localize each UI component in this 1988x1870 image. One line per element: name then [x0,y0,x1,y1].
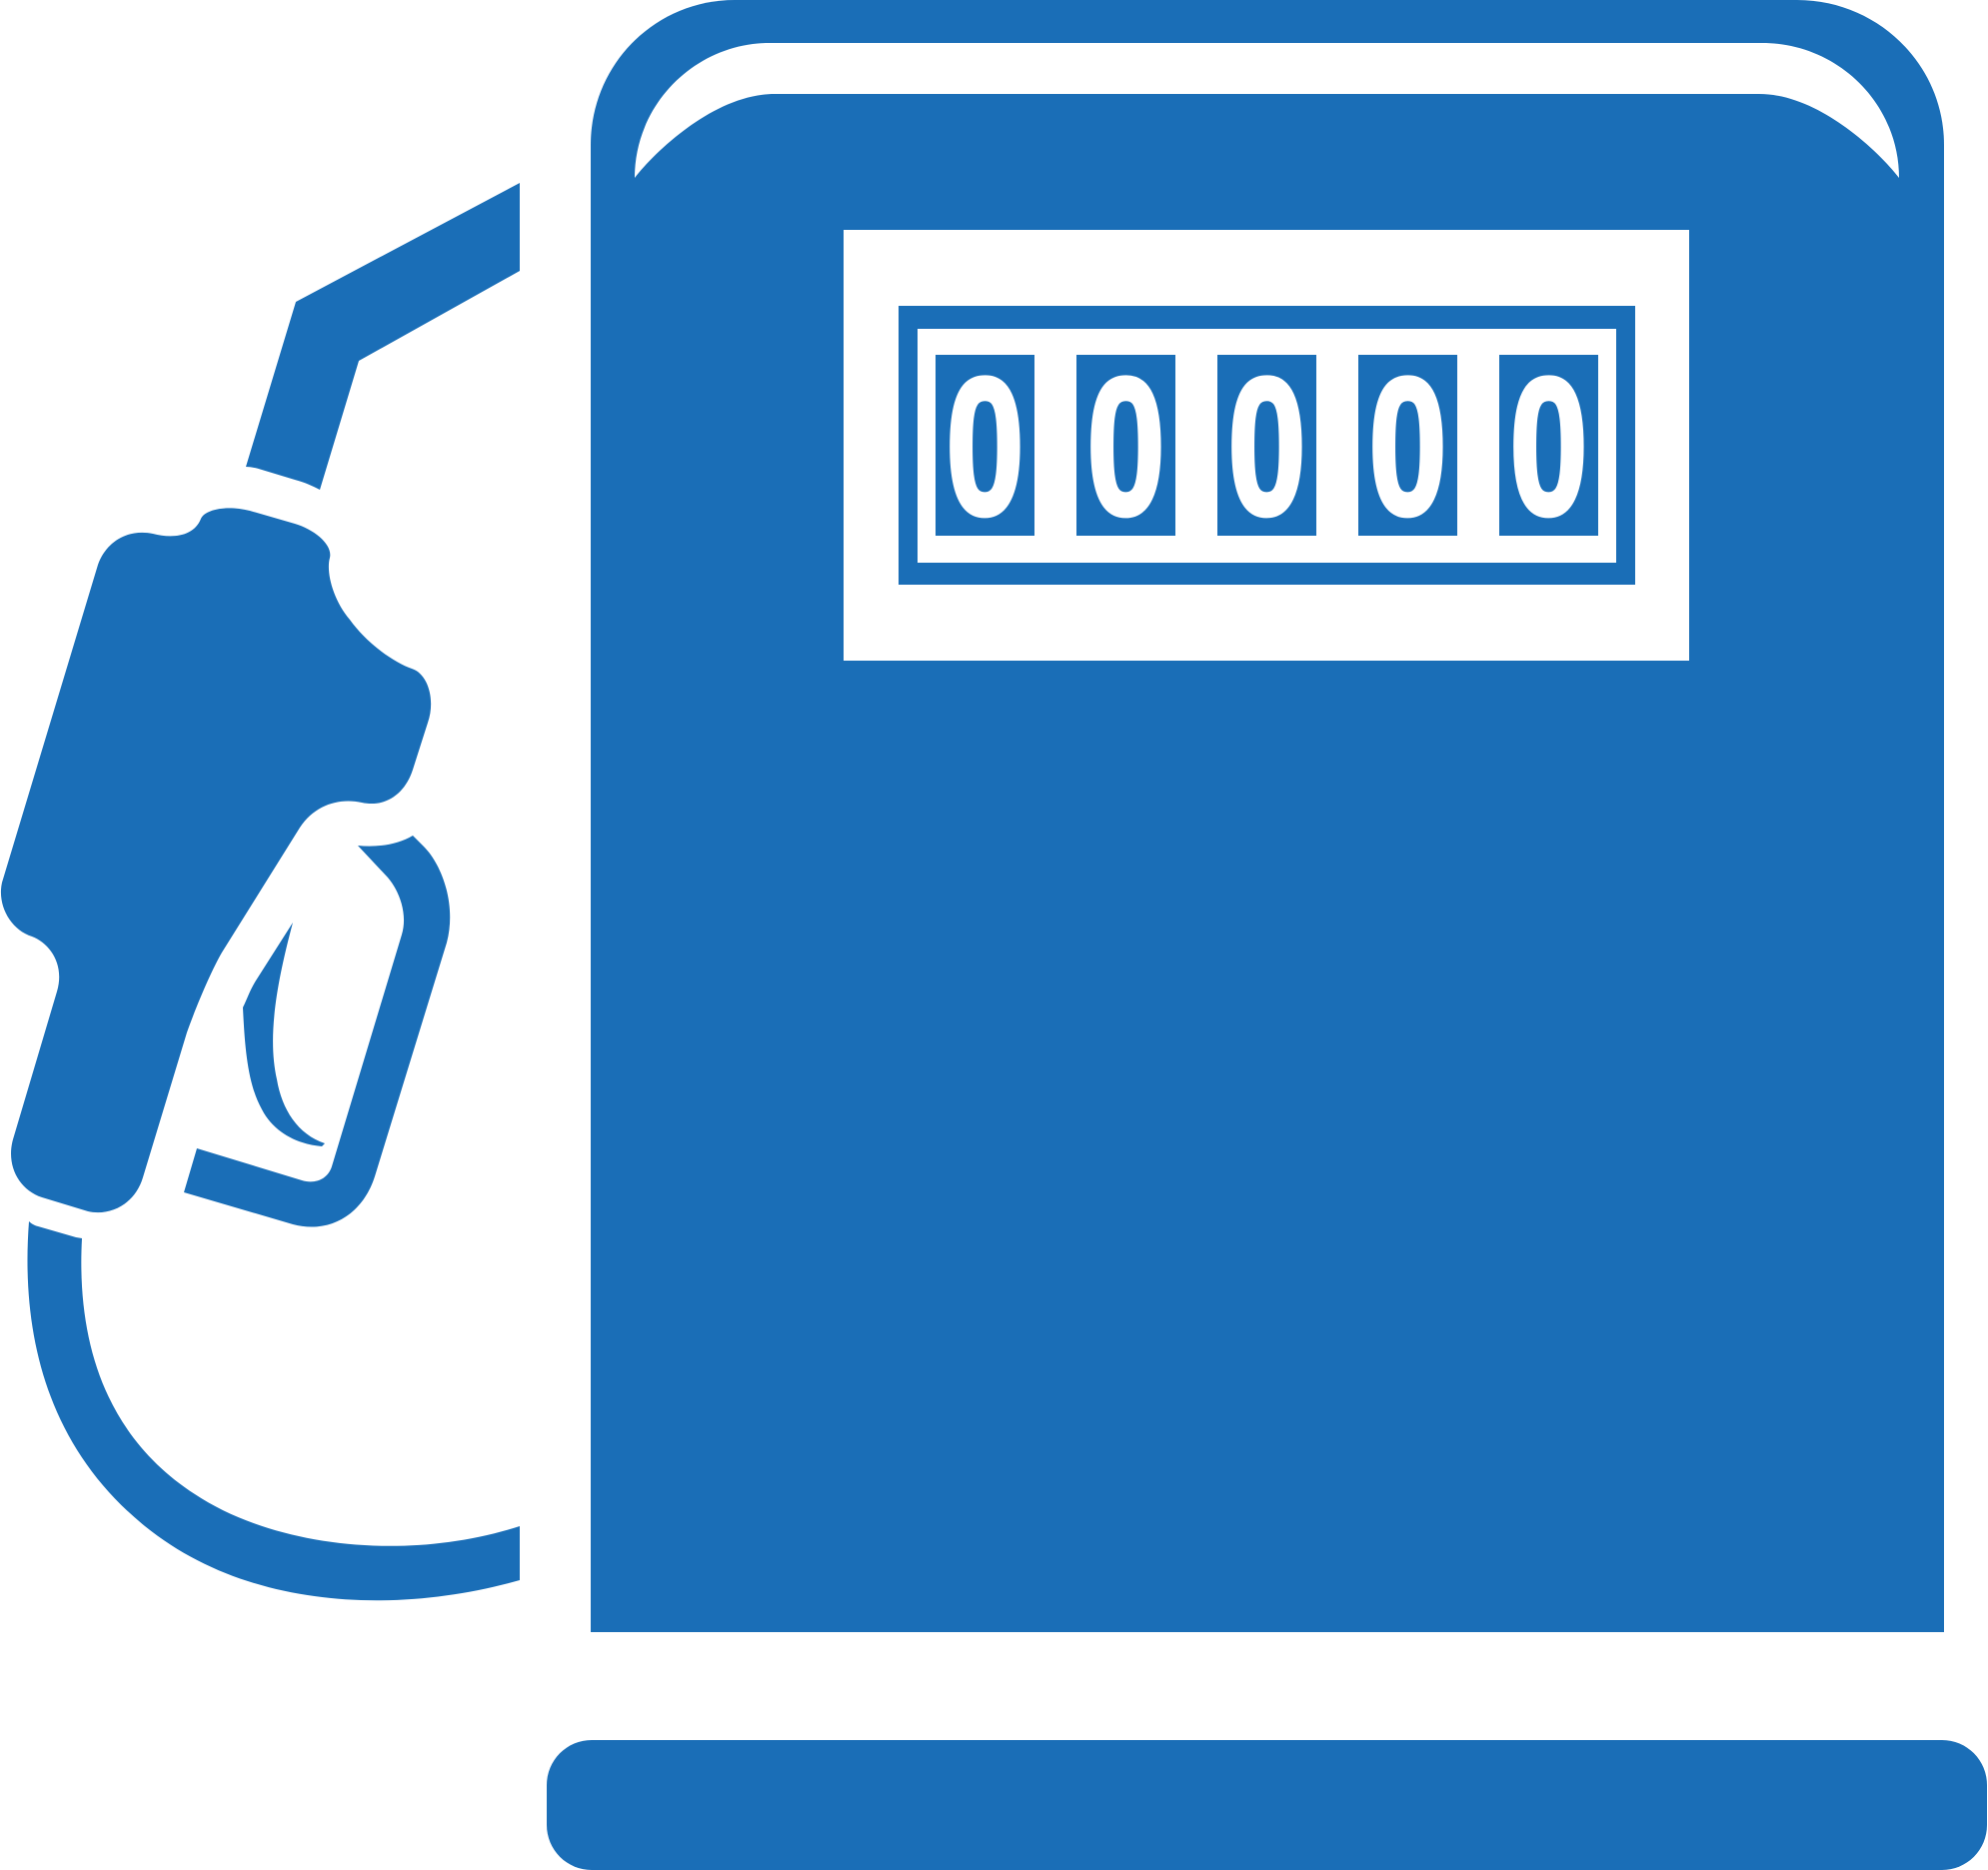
icon: nozzle handle [1,508,431,1212]
icon: pump base [547,1740,1987,1870]
icon: fuel hose [27,1221,520,1600]
icon: trigger lever [243,923,325,1146]
digit box 3: 0 [1227,338,1306,556]
panel: meter display [844,230,1689,661]
icon: pump body [591,0,1944,1632]
digit box 5: 0 [1509,338,1588,556]
digit box 2: 0 [1086,338,1165,556]
icon: nozzle spout [246,183,520,490]
digit box 1: 0 [946,338,1024,556]
icon: trigger guard [184,836,450,1227]
digit box 4: 0 [1368,338,1447,556]
